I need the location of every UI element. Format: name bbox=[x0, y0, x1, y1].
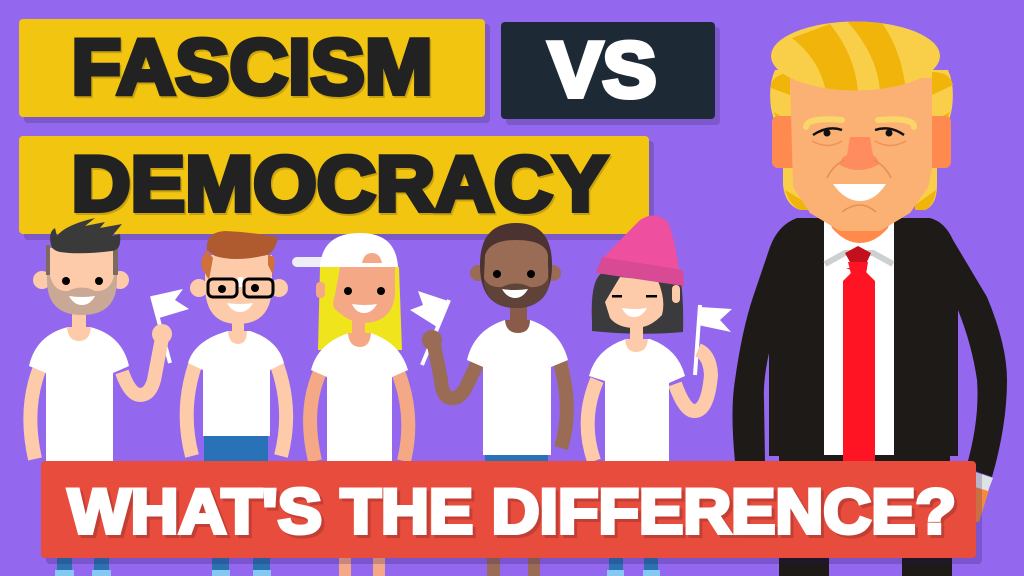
title box: VS: VS bbox=[548, 26, 656, 114]
title box: DEMOCRACY: DEMOCRACY bbox=[73, 142, 609, 230]
t-shirt bbox=[589, 339, 685, 461]
person 2: man with glasses bbox=[187, 231, 288, 576]
legs bbox=[779, 550, 952, 576]
arms bbox=[187, 365, 286, 456]
white cap bbox=[292, 233, 398, 267]
banner: what's the difference: WHAT'S THE DIFFERENCE? bbox=[71, 480, 959, 550]
hair bbox=[592, 273, 683, 334]
suit jacket bbox=[732, 218, 1007, 477]
t-shirt bbox=[29, 327, 129, 461]
arms bbox=[310, 372, 408, 461]
neck bbox=[348, 318, 371, 347]
flag bbox=[410, 291, 449, 365]
hand bbox=[974, 486, 989, 522]
neck bbox=[830, 222, 890, 243]
title box: VS bbox=[501, 22, 720, 125]
collar line bbox=[825, 253, 893, 264]
arms bbox=[434, 345, 567, 448]
head bbox=[33, 218, 129, 315]
arms bbox=[30, 338, 162, 459]
eyebrows bbox=[806, 119, 914, 127]
person 5: woman with pink beanie and flag bbox=[588, 215, 732, 576]
arms bbox=[588, 350, 711, 461]
hair bbox=[318, 267, 402, 350]
shirt cuff bbox=[975, 472, 993, 491]
back hair bbox=[770, 70, 953, 210]
legs bbox=[55, 558, 111, 576]
legs bbox=[487, 558, 540, 576]
white shirt bbox=[824, 218, 894, 455]
title box: DEMOCRACY: DEMOCRACY bbox=[72, 140, 608, 228]
banner: what's the difference bbox=[41, 461, 982, 564]
person 4: dark-skinned man with flag bbox=[410, 223, 568, 576]
legs bbox=[339, 558, 385, 576]
pink beanie bbox=[596, 215, 684, 286]
neck bbox=[228, 318, 247, 344]
nose bbox=[840, 137, 878, 170]
title box: DEMOCRACY bbox=[19, 136, 654, 240]
jeans bbox=[485, 453, 548, 461]
person 1: bearded man with flag bbox=[29, 218, 189, 576]
title box: FASCISM: FASCISM bbox=[72, 22, 432, 110]
t-shirt bbox=[467, 320, 568, 455]
head bbox=[470, 223, 561, 308]
face bbox=[790, 78, 932, 231]
banner: what's the difference: WHAT'S THE DIFFERENCE? bbox=[68, 477, 956, 547]
t-shirt bbox=[311, 333, 408, 461]
red tie bbox=[843, 246, 875, 461]
t-shirt bbox=[188, 331, 284, 436]
jeans bbox=[204, 436, 268, 461]
title box: FASCISM bbox=[19, 19, 490, 123]
eyes bbox=[812, 128, 906, 146]
face lines bbox=[827, 160, 891, 212]
person 3: blonde woman with white cap bbox=[292, 233, 408, 576]
neck bbox=[625, 322, 648, 352]
Trump figure bbox=[732, 20, 1007, 576]
ears bbox=[772, 116, 951, 168]
title box: FASCISM: FASCISM bbox=[73, 24, 434, 112]
head bbox=[605, 277, 680, 328]
legs bbox=[607, 558, 660, 576]
top hair bbox=[770, 20, 942, 92]
smile bbox=[833, 184, 886, 201]
head bbox=[190, 231, 288, 324]
legs bbox=[212, 558, 271, 576]
flag bbox=[695, 305, 732, 375]
neck bbox=[67, 312, 91, 341]
flag bbox=[152, 289, 189, 363]
neck bbox=[505, 300, 530, 333]
head bbox=[316, 267, 395, 323]
